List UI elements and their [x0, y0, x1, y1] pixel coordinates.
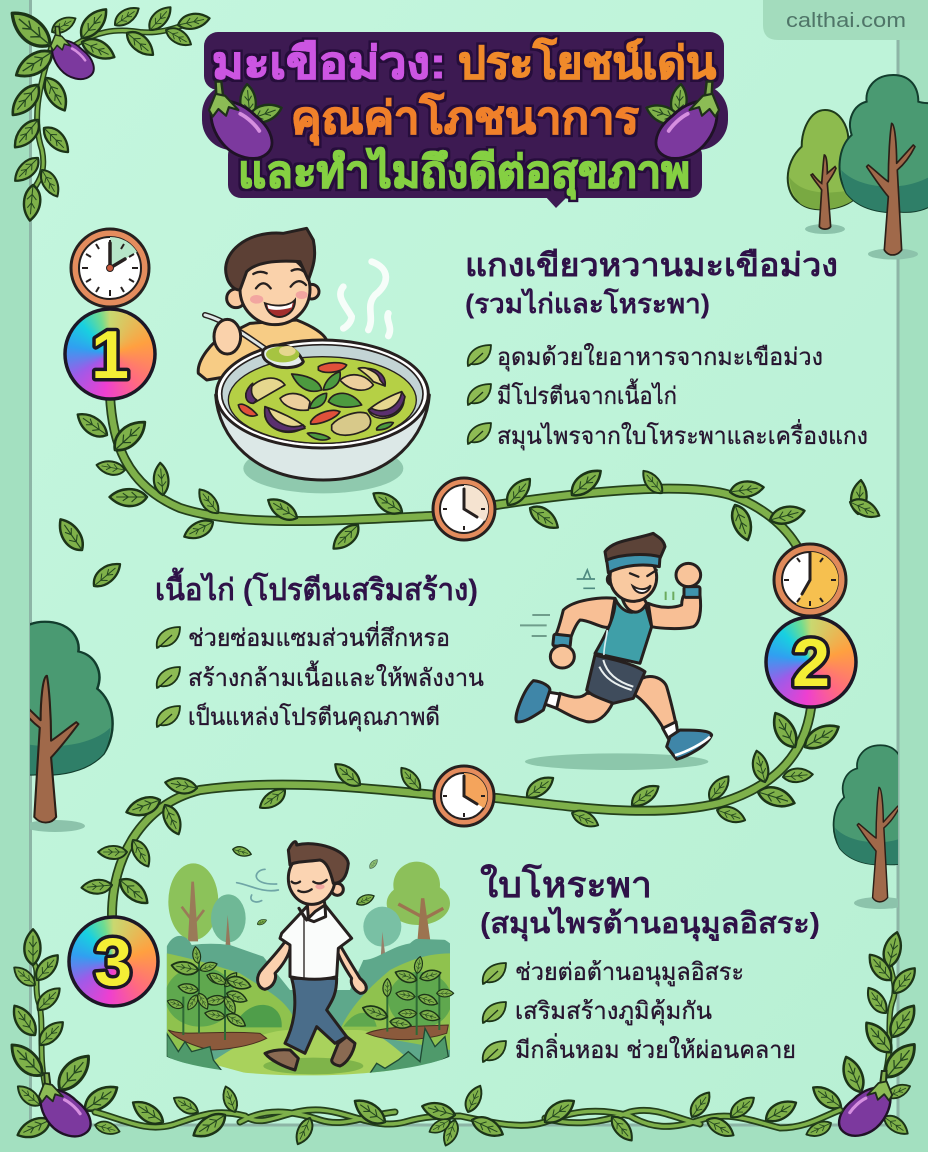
bullet list 3: ช่วยต่อต้านอนุมูลอิสระ [515, 959, 744, 987]
wind lines and drifting leaves [232, 845, 379, 926]
hair and headband [605, 533, 665, 573]
section 3 text [480, 863, 820, 1064]
subheading 3: (สมุนไพรต้านอนุมูลอิสระ) [480, 906, 820, 941]
spoon and hand [205, 315, 303, 368]
bullet list 3: มีกลิ่นหอม ช่วยให้ผ่อนคลาย [515, 1033, 796, 1064]
bullet list 1 [468, 343, 868, 451]
bullet list 2: ช่วยซ่อมแซมส่วนที่สึกหรอ [188, 621, 450, 652]
tank top [595, 598, 652, 663]
step 2 badge: 2 [792, 625, 830, 701]
title line 3: และทำไมถึงดีต่อสุขภาพ [238, 146, 690, 200]
shoes [265, 1050, 298, 1070]
step 2 badge [765, 616, 857, 708]
arms [258, 942, 291, 989]
bullet list 2 [157, 621, 484, 732]
back leg [553, 693, 613, 722]
curry ingredients [238, 363, 405, 440]
tree right [832, 744, 898, 909]
corner vine top left [5, 2, 211, 221]
title eggplant left [209, 82, 284, 158]
back shoe [516, 681, 550, 722]
back arm [555, 598, 615, 640]
shirt [198, 320, 327, 380]
clock top [71, 229, 149, 307]
bullet list 3: เสริมสร้างภูมิคุ้มกัน [515, 998, 712, 1026]
speed lines [520, 615, 550, 636]
steam [340, 262, 390, 336]
bowl body [216, 395, 429, 480]
illustration: man walking in garden [165, 842, 454, 1083]
herb plants left [166, 946, 252, 1040]
vine path 1 to 2 [73, 395, 806, 555]
garden scene [165, 936, 452, 1083]
clock middle 1 [433, 478, 495, 540]
title eggplant right [643, 82, 719, 158]
bullet list 1: สมุนไพรจากใบโหระพาและเครื่องแกง [497, 419, 868, 451]
illustration: running man [516, 533, 712, 770]
front leg [633, 677, 677, 728]
title backdrop [202, 32, 728, 208]
shirt [280, 905, 352, 979]
vine path 2 to 3 [81, 708, 843, 915]
title line 1: มะเขือม่วง: [212, 39, 446, 88]
head [288, 852, 343, 922]
background trees [168, 862, 450, 958]
tree left [30, 620, 114, 832]
step 3 badge: 3 [94, 924, 132, 1000]
watermark: calthai.com [786, 10, 906, 32]
front shoe [667, 730, 712, 759]
title line 1 [212, 36, 716, 88]
trees top right [788, 75, 928, 260]
bullet list 3 [483, 959, 796, 1064]
bullet list 1: มีโปรตีนจากเนื้อไก่ [497, 378, 677, 410]
hair [288, 842, 348, 883]
ground shadow [525, 753, 708, 770]
bullet list 2: เป็นแหล่งโปรตีนคุณภาพดี [188, 702, 440, 732]
watermark [763, 0, 928, 40]
front arm [648, 595, 701, 629]
illustration: man eating curry [198, 228, 429, 493]
floating leaves [53, 479, 883, 591]
heading 2: เนื้อไก่ (โปรตีนเสริมสร้าง) [155, 567, 478, 607]
step 3 badge [68, 916, 159, 1007]
title banner [202, 32, 728, 208]
hair [226, 228, 315, 290]
corner vine bottom left [5, 929, 122, 1143]
clock right [774, 544, 846, 616]
section 2 text [155, 567, 484, 732]
ears and head [227, 254, 319, 325]
bowl shadow [243, 443, 403, 493]
corner vine bottom right [804, 930, 921, 1140]
heading 1: แกงเขียวหวานมะเขือม่วง [465, 247, 838, 283]
bowl rim and curry [216, 340, 428, 448]
section 1 text [465, 247, 868, 451]
bottom vine [95, 1083, 840, 1148]
herb plants right [361, 956, 454, 1035]
heading 3: ใบโหระพา [480, 863, 652, 905]
step 1 badge: 1 [91, 317, 129, 393]
clock middle 2 [434, 766, 494, 826]
head [607, 553, 657, 612]
title line 1: ประโยชน์เด่น [458, 36, 716, 88]
shorts [587, 655, 645, 703]
subheading 1: (รวมไก่และโหระพา) [465, 287, 710, 319]
step 1 badge [64, 308, 156, 400]
bullet list 2: สร้างกล้ามเนื้อและให้พลังงาน [188, 660, 484, 692]
bullet list 1: อุดมด้วยใยอาหารจากมะเขือม่วง [497, 343, 823, 372]
pants [285, 978, 347, 1053]
title line 2: คุณค่าโภชนาการ [291, 91, 639, 146]
